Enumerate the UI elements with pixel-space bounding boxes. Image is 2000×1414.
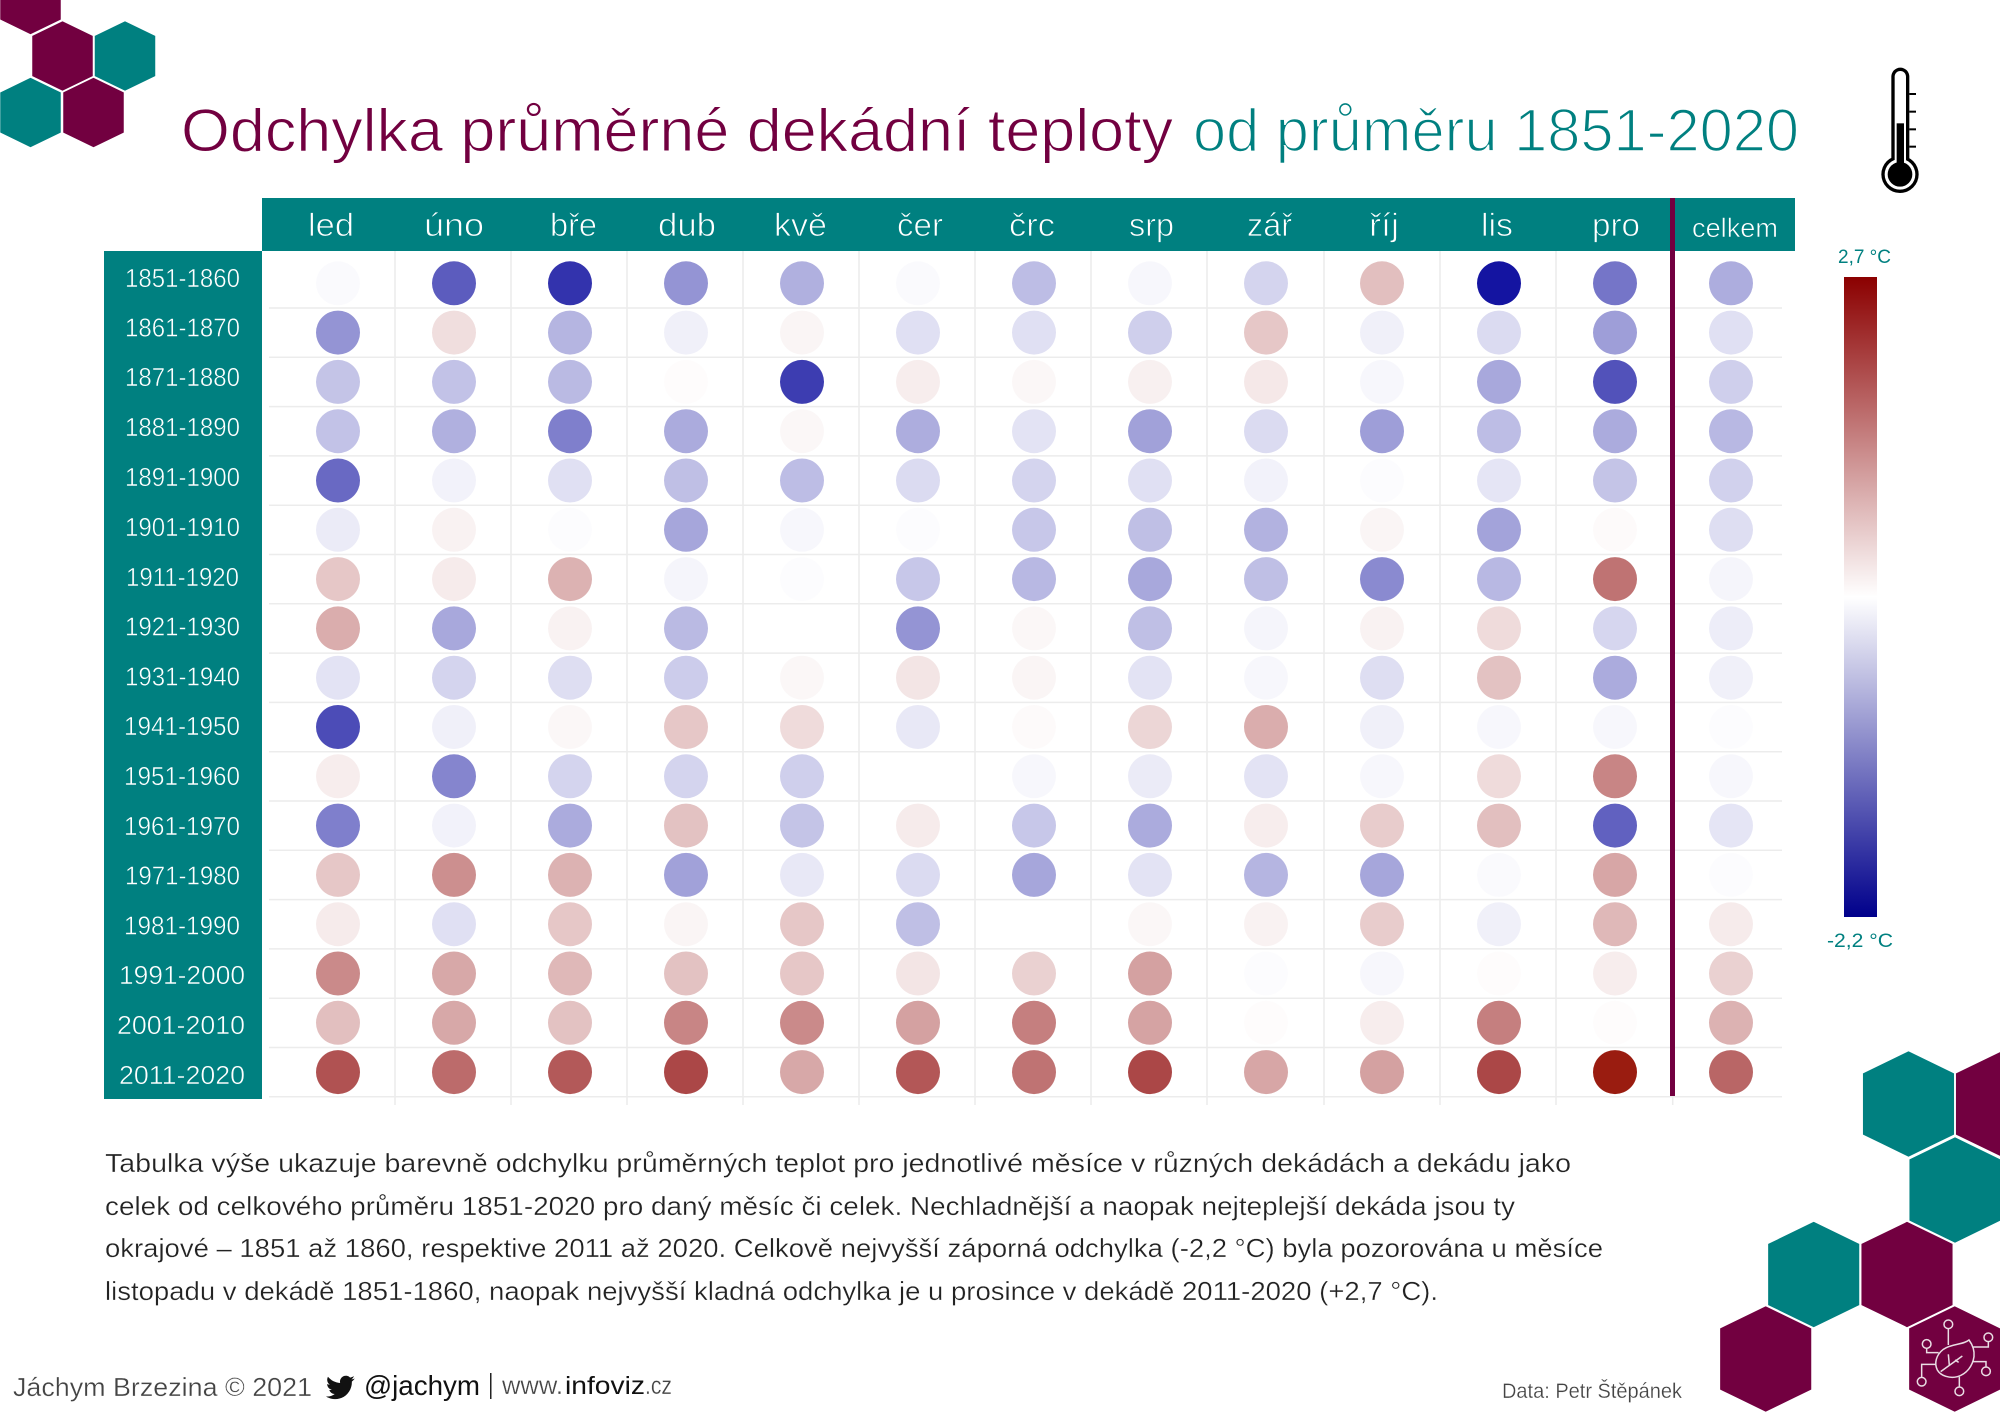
row labels: decades: 1981-1990 <box>124 910 240 940</box>
colour scale legend <box>1827 247 1893 952</box>
row 1931-1940 <box>316 656 1753 700</box>
description paragraph: celek od celkového průměru 1851-2020 pro daný měsíc či celek. Nechladnější a naopak nejteplejší dekáda jsou ty <box>105 1191 1515 1221</box>
row 1881-1890 <box>316 409 1753 453</box>
row 2001-2010 <box>316 1001 1753 1045</box>
icon: thermometer <box>1881 68 1919 193</box>
row labels: decades: 2011-2020 <box>119 1060 245 1090</box>
row labels: decades: 1971-1980 <box>125 860 240 890</box>
table header: months: celkem <box>1692 213 1778 243</box>
colour scale legend: -2,2 °C <box>1827 931 1893 952</box>
row labels: decades: 1941-1950 <box>124 711 240 741</box>
row labels: decades: 1951-1960 <box>124 761 240 791</box>
author credit: infoviz <box>565 1372 645 1400</box>
colour scale legend: 2,7 °C <box>1838 247 1891 268</box>
author credit: .cz <box>645 1372 672 1400</box>
row labels: decades: 1921-1930 <box>125 612 240 642</box>
table header: months: srp <box>1129 207 1174 243</box>
table header: months <box>262 198 1795 251</box>
row 1891-1900 <box>316 458 1753 502</box>
row labels: decades: 1991-2000 <box>119 960 245 990</box>
title: Odchylka průměrné dekádní teploty <box>181 97 1173 164</box>
row labels: decades: 1861-1870 <box>125 312 240 342</box>
icon: leaf with circuit <box>1917 1320 1993 1396</box>
row labels: decades: 1891-1900 <box>125 462 240 492</box>
row labels: decades: 1911-1920 <box>126 562 239 592</box>
title <box>181 97 1799 164</box>
table grid lines <box>269 251 1782 1105</box>
table header: months: lis <box>1481 207 1513 243</box>
row 1961-1970 <box>316 804 1753 848</box>
title: od průměru 1851-2020 <box>1193 97 1799 164</box>
decorative hexagons top left <box>0 0 156 148</box>
row labels: decades: 1881-1890 <box>125 412 240 442</box>
description paragraph: Tabulka výše ukazuje barevně odchylku průměrných teplot pro jednotlivé měsíce v různých dekádách a dekádu jako <box>105 1148 1571 1178</box>
data source: Data: Petr Štěpánek <box>1502 1380 1682 1403</box>
icon: twitter bird <box>326 1376 355 1399</box>
author credit: Jáchym Brzezina © 2021 <box>13 1372 312 1402</box>
row 1851-1860 <box>316 261 1753 305</box>
row 1971-1980 <box>316 853 1753 897</box>
row 1981-1990 <box>316 902 1753 946</box>
description paragraph: listopadu v dekádě 1851-1860, naopak nejvyšší kladná odchylka je u prosince v dekádě 2011-2020 (+2,7 °C). <box>105 1276 1438 1306</box>
heatmap dots <box>316 261 1753 1094</box>
table header: months: říj <box>1369 207 1399 243</box>
decorative hexagons bottom right <box>1719 1050 2000 1412</box>
table header: months: čer <box>897 207 943 243</box>
table header: months: led <box>308 207 354 243</box>
table header: months: pro <box>1592 207 1640 243</box>
row labels: decades: 1851-1860 <box>125 263 240 293</box>
table header: months: kvě <box>774 207 827 243</box>
author credit: www. <box>501 1372 563 1400</box>
table header: months: dub <box>658 207 716 243</box>
row 1951-1960 <box>316 754 1753 798</box>
author credit: @jachym <box>364 1370 480 1401</box>
row 1871-1880 <box>316 360 1753 404</box>
description paragraph <box>105 1148 1603 1306</box>
table header: months: úno <box>424 207 484 243</box>
description paragraph: okrajové – 1851 až 1860, respektive 2011 až 2020. Celkově nejvyšší záporná odchylka (-2,2 °C) byla pozorována u měsíce <box>105 1233 1603 1263</box>
table header: months: zář <box>1247 207 1293 243</box>
row labels: decades: 1901-1910 <box>125 512 240 542</box>
row labels: decades: 1961-1970 <box>124 811 240 841</box>
row 2011-2020 <box>316 1050 1753 1094</box>
row labels: decades <box>104 251 262 1099</box>
row 1911-1920 <box>316 557 1753 601</box>
table header: months: črc <box>1009 207 1055 243</box>
row 1921-1930 <box>316 606 1753 650</box>
row 1941-1950 <box>316 705 1753 749</box>
vertical divider before total column <box>1670 198 1675 1096</box>
row 1861-1870 <box>316 311 1753 355</box>
row 1991-2000 <box>316 952 1753 996</box>
row 1901-1910 <box>316 508 1753 552</box>
author credit <box>13 1370 672 1402</box>
table header: months: bře <box>550 207 597 243</box>
row labels: decades: 2001-2010 <box>117 1010 245 1040</box>
row labels: decades: 1931-1940 <box>125 662 240 692</box>
row labels: decades: 1871-1880 <box>125 362 240 392</box>
